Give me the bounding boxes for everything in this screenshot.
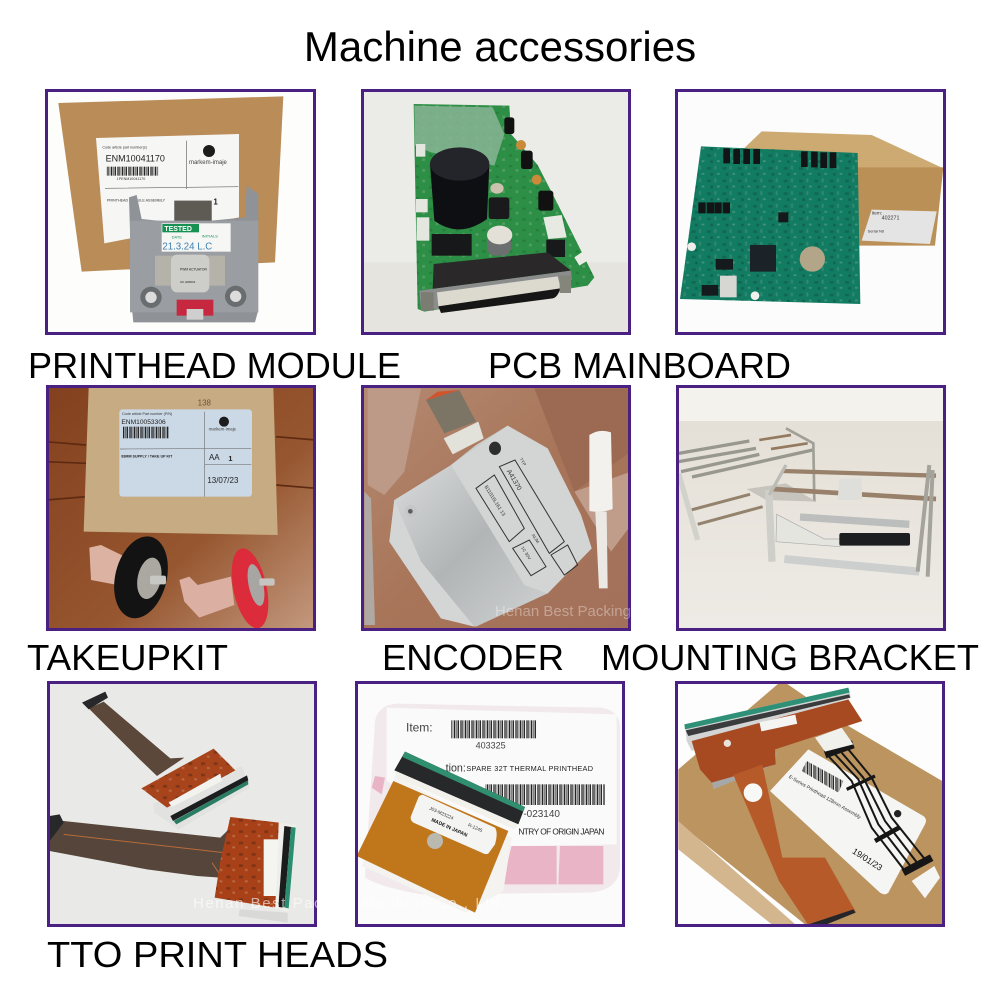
white plastic case [365, 704, 620, 894]
label: TTO print heads: TTO PRINT HEADS [47, 934, 388, 975]
item label [387, 708, 617, 846]
encoder body [389, 426, 592, 627]
label: PCB mainboard: PCB MAINBOARD [488, 345, 791, 386]
tested tag: DATE [172, 234, 182, 239]
actuator plate: PWM ACTUATOR [180, 268, 207, 272]
panel: take up kit photo: 138 [198, 399, 212, 408]
label: printhead module: PRINTHEAD MODULE [28, 345, 401, 386]
flexible ribbon [733, 764, 856, 925]
product label [862, 210, 937, 244]
shipping label: PRINTHEAD MODULE ASSEMBLY [107, 198, 166, 202]
product label: ENM10053306 [121, 419, 166, 426]
front bracket [769, 465, 936, 577]
title: Machine accessories [304, 23, 696, 70]
shipping label: 1PENM10041170 [117, 177, 145, 181]
product label [119, 409, 252, 497]
product label: 13/07/23 [207, 476, 239, 485]
label: takeupkit: TAKEUPKIT [27, 637, 228, 678]
panel: printhead module photo [58, 96, 284, 322]
white label: E-Series Printhead 128mm Assembly [787, 774, 862, 821]
watermark: encoder: Henan Best Packing [495, 603, 631, 620]
black roller [839, 533, 910, 546]
print head [684, 688, 862, 927]
lower print head [50, 814, 296, 923]
icon: cardboard box [58, 96, 283, 272]
shipping label: markem-imaje [189, 160, 228, 166]
label: mounting bracket: MOUNTING BRACKET [601, 637, 979, 678]
printhead module [129, 186, 258, 322]
item label: tion: [446, 763, 466, 775]
product label: 1 [228, 454, 232, 463]
encoder rating plate: B11016L161 13 [483, 485, 506, 517]
tested tag: TESTED [164, 226, 192, 233]
actuator plate [171, 255, 209, 292]
panel: mounting bracket photo [676, 385, 946, 631]
black spool [89, 536, 168, 618]
item label: -023140 [523, 809, 560, 820]
shipping label: ENM10041170 [106, 154, 165, 164]
cardboard box [678, 684, 945, 927]
cardboard box [743, 131, 943, 246]
panel border [676, 90, 944, 334]
product label: Serial N0 [868, 228, 885, 233]
panel: thermal printhead photo [358, 704, 620, 913]
encoder rating plate: TYP [518, 457, 527, 467]
capacitor [430, 147, 489, 229]
black wire harness [825, 744, 932, 873]
white label [770, 749, 926, 894]
panel: encoder photo [361, 385, 631, 631]
D-sub connector [419, 252, 572, 313]
green circuit board [414, 104, 594, 312]
product label: markem-imaje [209, 427, 237, 432]
item label: NTRY OF ORIGIN JAPAN [518, 826, 604, 836]
encoder rating plate: A41370 [505, 468, 523, 492]
white label: 19/01/23 [851, 846, 884, 873]
panel border [356, 682, 624, 926]
printhead label: MADE IN JAPAN [430, 817, 469, 839]
shipping label [96, 134, 239, 243]
actuator plate: UK H83601 [180, 280, 196, 284]
product label: Item: [872, 210, 882, 215]
tested tag: INITIALS [202, 234, 218, 239]
item label: SPARE 32T THERMAL PRINTHEAD [466, 764, 593, 773]
red spool [179, 545, 275, 632]
upper print head [82, 692, 250, 830]
rear bracket [679, 428, 814, 540]
white plate [776, 514, 840, 547]
printhead [357, 752, 525, 913]
encoder rating plate [476, 457, 578, 576]
panel border [362, 386, 630, 630]
panel border [676, 682, 944, 926]
shipping label: Code article part number(s) [102, 146, 147, 150]
panel border [46, 90, 314, 334]
green circuit board [680, 146, 860, 304]
panel border [678, 386, 944, 630]
product label: 402271 [882, 216, 899, 222]
panel: print head with cable photo [675, 681, 945, 927]
watermark: print heads: Henan Best Packing Machine Co., Ltd. [193, 895, 505, 912]
panel: take up kit photo [46, 385, 316, 632]
product label: Code article Part number (P/N) [122, 412, 172, 416]
encoder rating plate: 1C 30V [520, 546, 532, 561]
product label: 83MM SUPPLY / TAKE UP KIT [121, 455, 173, 459]
printhead label: J03-M23224 [429, 806, 455, 821]
printhead label [411, 795, 497, 854]
panel border [48, 682, 316, 926]
shipping label: 1 [213, 198, 218, 207]
panel: PCB mainboard photo [361, 89, 631, 335]
tested tag [162, 223, 231, 252]
tested tag: 21.3.24 L.C [162, 241, 212, 252]
white plastic tool [589, 431, 613, 588]
white cable connectors [815, 728, 940, 898]
connector [426, 390, 484, 454]
panel: PCB on box photo [680, 131, 943, 304]
cardboard sheet [84, 388, 278, 535]
item label: 403325 [476, 741, 506, 751]
product label: AA [209, 453, 220, 462]
panel: TTO print heads photo [47, 681, 317, 927]
encoder rating plate: ALIM. [531, 533, 541, 545]
printhead label: R-1245 [467, 822, 484, 833]
item label: Item: [406, 721, 433, 735]
panel border [48, 386, 314, 630]
label: encoder: ENCODER [382, 637, 564, 678]
panel border [362, 90, 630, 334]
